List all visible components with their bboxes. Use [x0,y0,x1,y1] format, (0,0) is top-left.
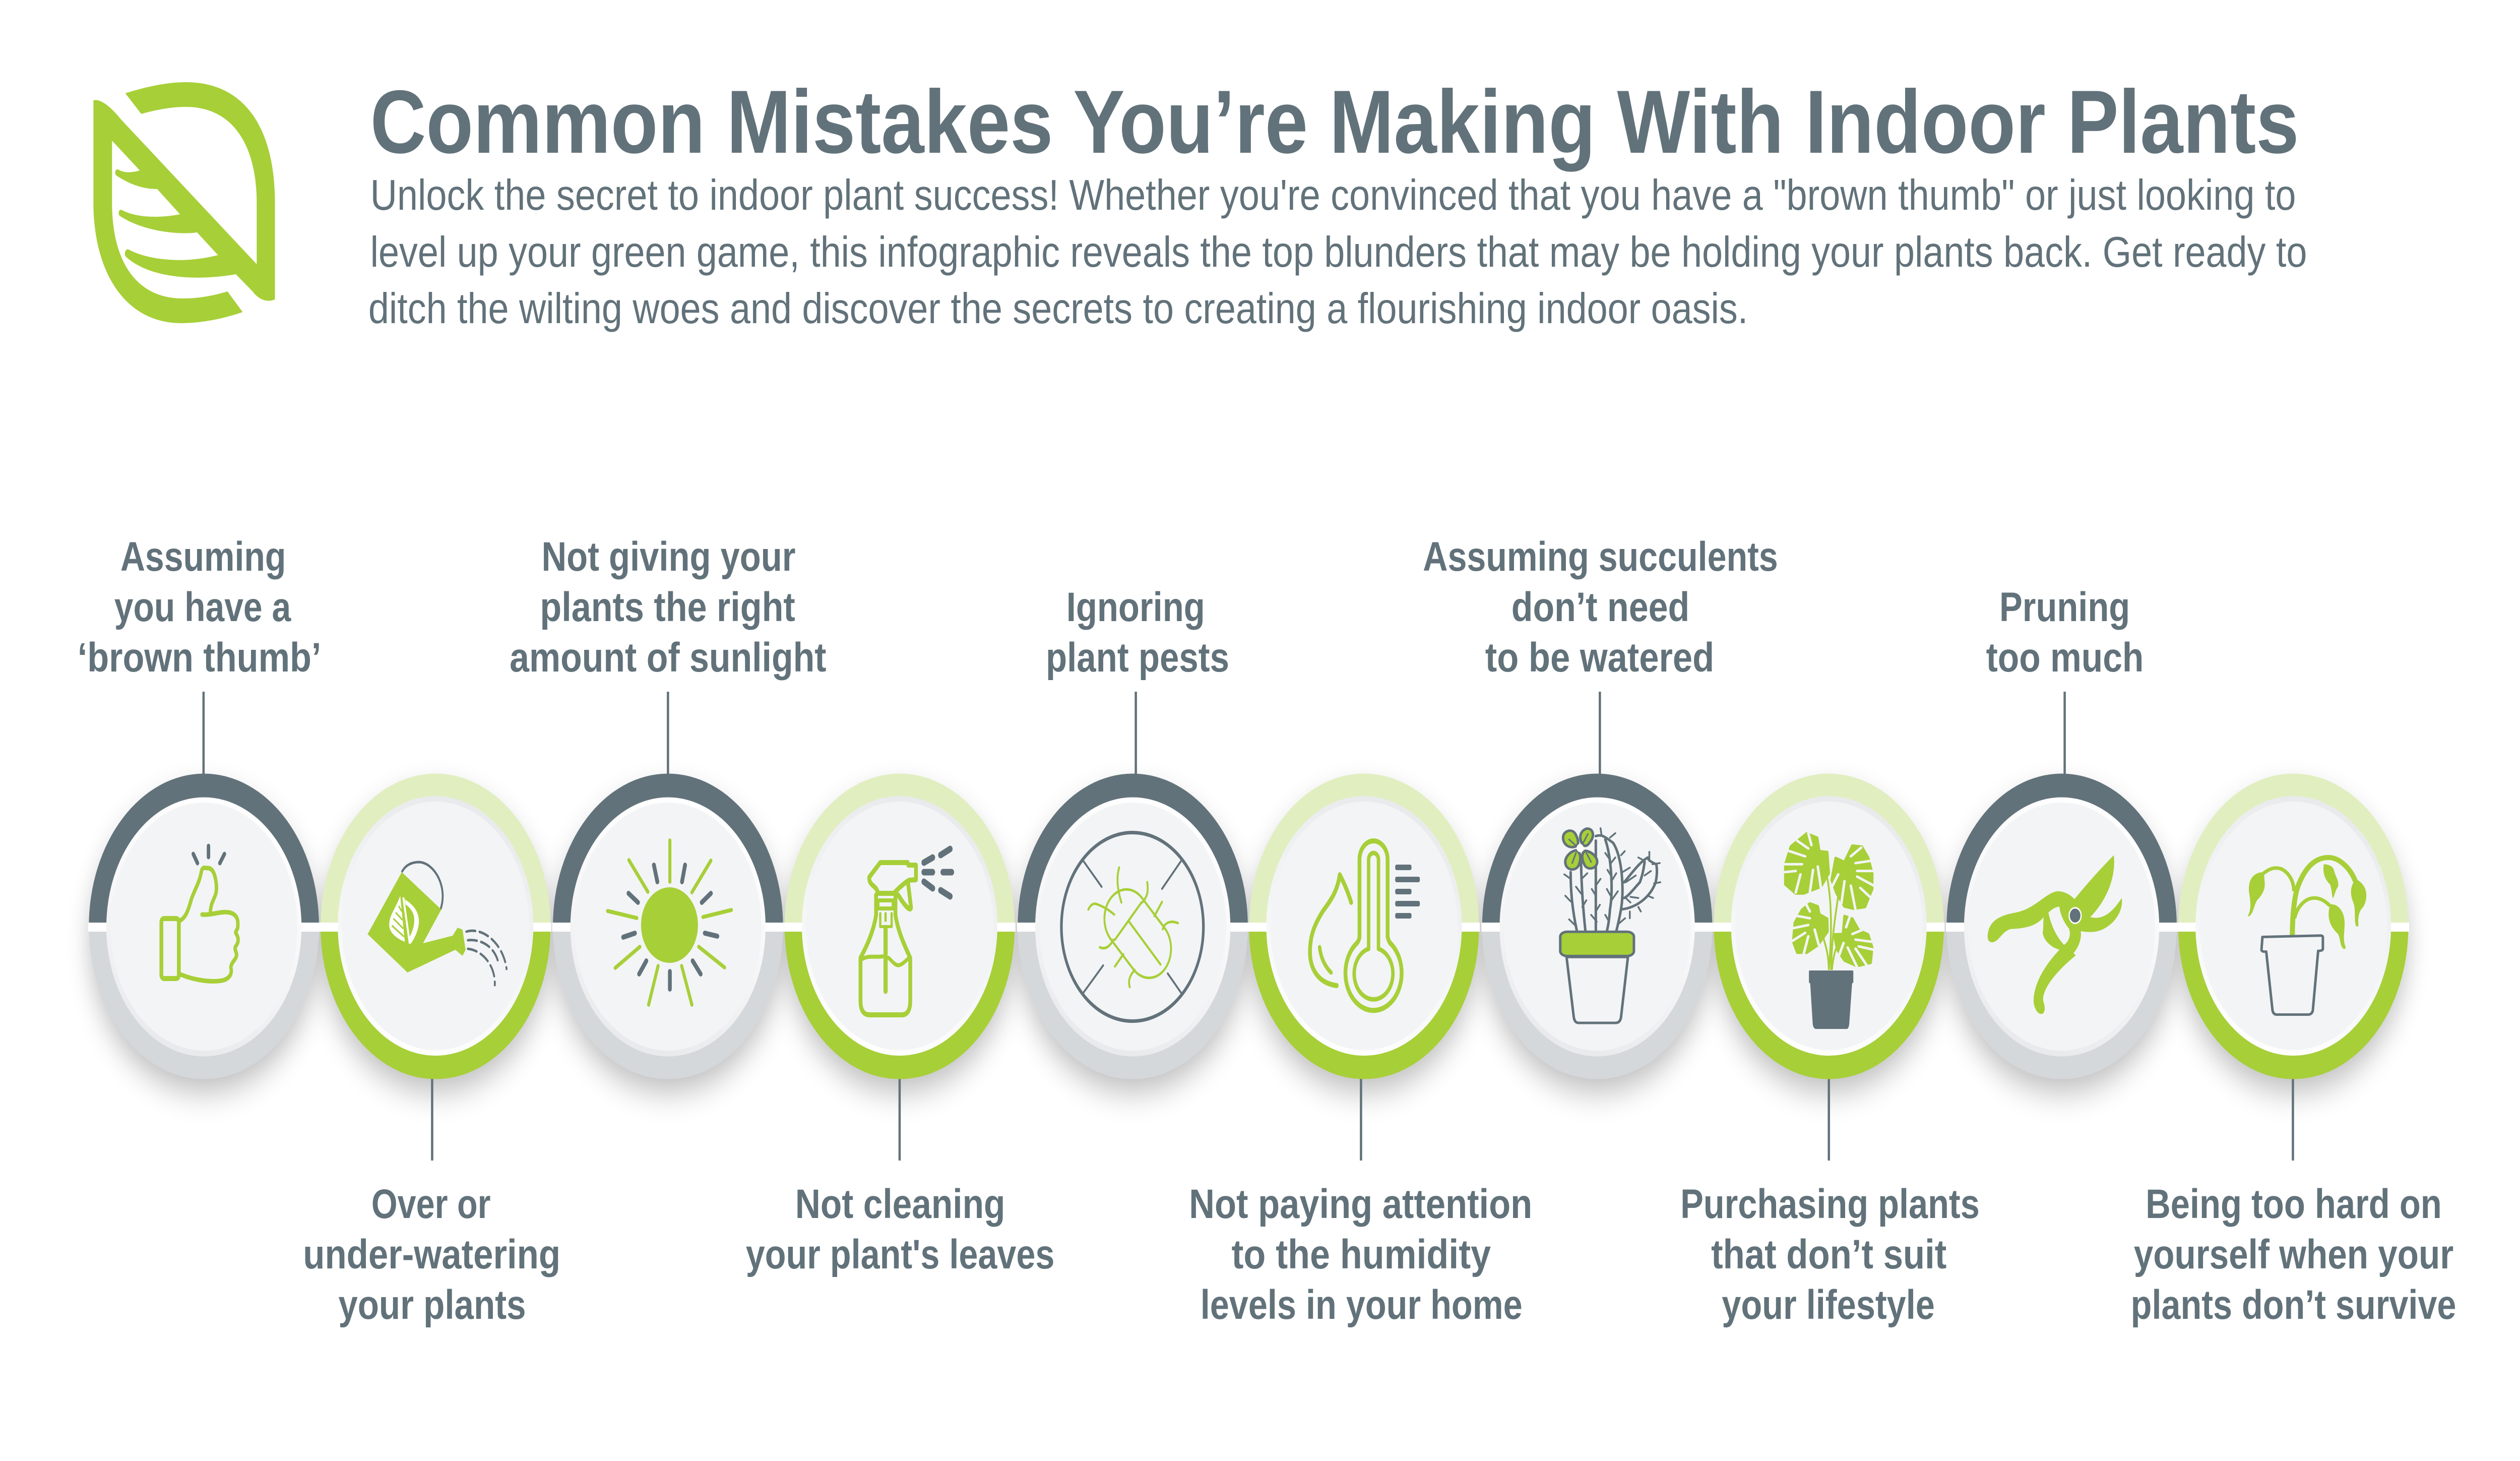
label: pruning: Pruning [1999,584,2130,630]
label: too hard on yourself: plants don’t survive [2131,1282,2456,1328]
label: lifestyle: Purchasing plants [1680,1181,1980,1227]
intro paragraph: level up your green game, this infographic reveals the top blunders that may be holding your plants back. Get ready to [370,228,2307,276]
intro paragraph [368,171,2307,332]
label: pests: plant pests [1046,635,1229,681]
icon: monstera plant [1784,833,1874,1029]
intro paragraph: ditch the wilting woes and discover the secrets to creating a flourishing indoor oasis. [368,284,1748,332]
label: sunlight: Not giving your [541,534,796,580]
icon: potted cactus [1560,828,1660,1023]
ring 10 [2177,773,2409,1079]
title: Common Mistakes You’re Making With Indoor Plants [370,72,2299,172]
label: sunlight [510,534,827,681]
ring 8 [1713,773,1944,1079]
ring 2 [320,773,551,1079]
ring 1 [88,773,320,1079]
ring 7 [1481,773,1713,1079]
label: assuming brown thumb: Assuming [120,534,286,580]
icon: humidity drop and thermometer [1310,841,1420,1010]
label: too hard on yourself: Being too hard on [2146,1181,2442,1227]
ring 4 [784,773,1016,1079]
label: humidity: levels in your home [1201,1282,1523,1328]
label: succulents: Assuming succulents [1423,534,1778,580]
label: assuming brown thumb: ‘brown thumb’ [78,635,321,681]
label: sunlight: amount of sunlight [510,635,827,681]
label: assuming brown thumb [78,534,321,681]
label: watering: under-watering [303,1232,560,1277]
icon: wilted plant in pot [2248,858,2366,1014]
connector lines [204,692,2293,1161]
label: lifestyle [1680,1181,1980,1328]
label: pruning [1986,584,2144,681]
label: assuming brown thumb: you have a [114,584,291,630]
logo: leaf [93,82,275,323]
label: too hard on yourself: yourself when your [2134,1232,2453,1277]
ring shadows [91,792,2407,1092]
icon: pruning shears [1988,855,2122,1014]
ring 5 [1017,773,1248,1079]
label: lifestyle: that don’t suit [1711,1232,1946,1277]
label: cleaning [746,1181,1054,1277]
icon: spray bottle [860,849,952,1015]
intro paragraph: Unlock the secret to indoor plant success! Whether you're convinced that you have a "brown thumb" or just looking to [370,171,2296,219]
label: pruning: too much [1986,635,2144,681]
ring 9 [1946,773,2177,1079]
label: succulents: don’t need [1511,584,1689,630]
label: watering [303,1181,560,1328]
label: succulents: to be watered [1485,635,1714,681]
ring 6 [1248,773,1480,1079]
label: humidity: Not paying attention [1189,1181,1532,1227]
label: lifestyle: your lifestyle [1722,1282,1935,1328]
icon: watering can [367,862,507,985]
icon: crossed-out bug [1061,833,1204,1021]
label: humidity: to the humidity [1231,1232,1491,1277]
label: watering: your plants [338,1282,526,1328]
label: succulents [1423,534,1778,681]
label: cleaning: your plant's leaves [746,1232,1054,1277]
label: humidity [1189,1181,1532,1328]
label: pests: Ignoring [1066,584,1205,630]
label: too hard on yourself [2131,1181,2456,1328]
label: cleaning: Not cleaning [795,1181,1005,1227]
label: watering: Over or [371,1181,490,1227]
label: pests [1046,584,1229,681]
ring 3 [552,773,784,1079]
icon: thumbs up [161,846,238,981]
icon: sun [608,840,731,1005]
label: sunlight: plants the right [540,584,795,630]
